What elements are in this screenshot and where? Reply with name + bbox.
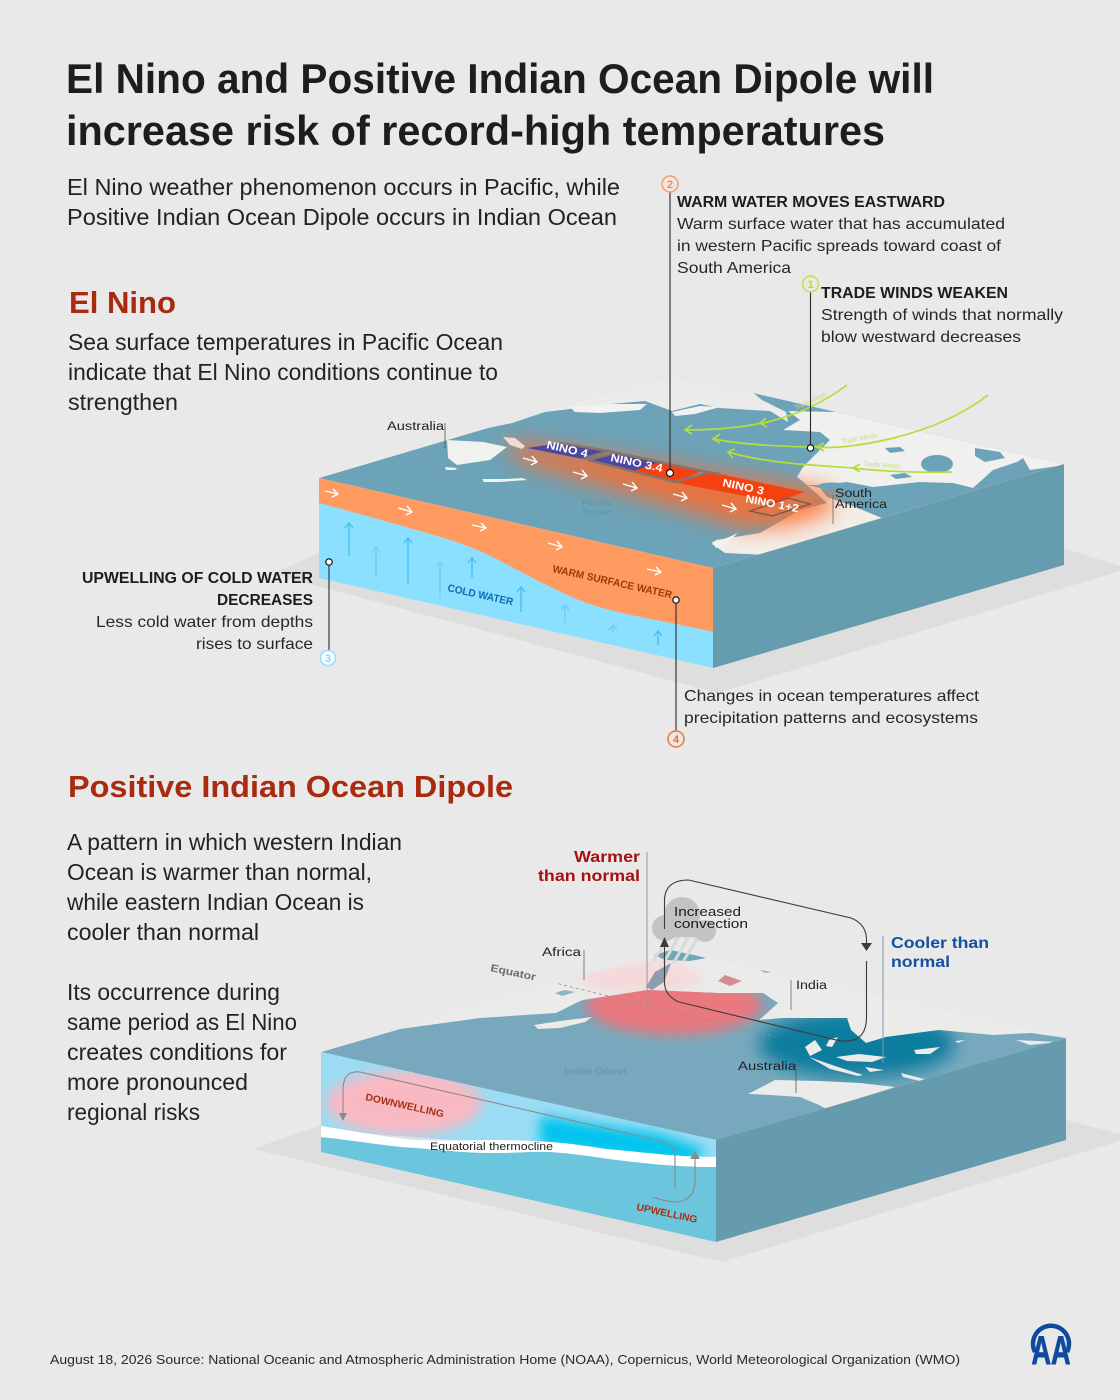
callout: cooler than normal: normal	[891, 954, 950, 971]
text: El Nino description: Sea surface temperatures in Pacific Ocean	[68, 329, 503, 355]
label: downwelling: DOWNWELLING	[364, 1092, 445, 1120]
block right side	[716, 1038, 1066, 1242]
label: India	[791, 980, 828, 1010]
trade wind labels: Trade Winds	[794, 391, 828, 412]
callout: cooler than normal	[883, 935, 989, 1063]
title: increase risk of record-high temperatures	[66, 107, 885, 154]
rain	[654, 935, 705, 962]
convection loop arrows	[664, 880, 866, 1041]
pink haze on land	[578, 962, 702, 994]
label: South America	[833, 488, 888, 524]
text: dipole description: cooler than normal	[67, 919, 259, 945]
text: El Nino description: indicate that El Nino conditions continue to	[68, 359, 498, 385]
text: dipole description: more pronounced	[67, 1069, 248, 1095]
Nino labels: NINO 4	[545, 439, 590, 461]
callout 2: warm water moves eastward: Warm surface water that has accumulated	[677, 216, 1005, 233]
land: Asia	[486, 374, 788, 429]
callout 3: upwelling of cold water decreases	[82, 559, 336, 666]
trade wind labels: Trade Winds	[841, 432, 878, 446]
islands	[805, 1040, 822, 1056]
logo: AA	[1032, 1326, 1070, 1373]
Nino labels: NINO 1+2	[744, 493, 800, 515]
Nino labels: NINO 3.4	[609, 452, 665, 475]
footer source: August 18, 2026 Source: National Oceanic and Atmospheric Administration Home (NOAA), Copernicus, World Meteorological Organization (WMO)	[50, 1352, 960, 1367]
callout 4: ocean temperature effects: Changes in ocean temperatures affect	[684, 688, 980, 705]
label: Pacific Ocean	[582, 499, 613, 517]
text: dipole description	[66, 829, 402, 1125]
callout 3: upwelling of cold water decreases: 3	[325, 653, 331, 665]
callout 4: ocean temperature effects: 4	[673, 734, 680, 746]
label: Australia	[387, 421, 445, 448]
label: Australia: Australia	[738, 1061, 797, 1073]
callout: cooler than normal: Cooler than	[891, 935, 989, 952]
callout 2: warm water moves eastward: WARM WATER MOVES EASTWARD	[677, 194, 945, 211]
label: Africa	[542, 947, 584, 980]
subtitle: El Nino weather phenomenon occurs in Pacific, while	[67, 174, 620, 200]
callout 3: upwelling of cold water decreases: DECREASES	[217, 592, 313, 609]
callout: warmer than normal	[538, 849, 647, 1009]
title	[66, 55, 934, 154]
map surface	[319, 372, 1064, 568]
block right side	[713, 464, 1064, 668]
label: equatorial thermocline: Equatorial thermocline	[430, 1141, 553, 1153]
label: Equator: Equator	[489, 962, 537, 983]
text: El Nino description	[68, 329, 503, 415]
label: increased convection	[674, 904, 748, 931]
block shadow	[253, 1120, 1120, 1262]
block front: upper water	[321, 1052, 716, 1160]
circulation arrows in the water	[343, 1072, 695, 1202]
cool upwelling zone	[540, 1116, 706, 1165]
ocean	[321, 990, 1066, 1140]
callout 1: trade winds weaken: TRADE WINDS WEAKEN	[821, 285, 1008, 302]
text: dipole description: same period as El Nino	[67, 1009, 297, 1035]
title: El Nino and Positive Indian Ocean Dipole will	[66, 55, 934, 102]
cloud	[652, 897, 716, 942]
text: dipole description: creates conditions for	[67, 1039, 287, 1065]
warm water glow	[505, 440, 832, 528]
callout: warmer than normal: than normal	[538, 868, 640, 885]
label: Pacific Ocean: Pacific	[582, 499, 613, 508]
Nino regions	[527, 443, 810, 516]
callout 2: warm water moves eastward	[662, 176, 1005, 476]
callout 4: ocean temperature effects: precipitation patterns and ecosystems	[684, 710, 978, 727]
text: dipole description: Its occurrence during	[67, 979, 280, 1005]
text: dipole description: regional risks	[67, 1099, 200, 1125]
map surface	[321, 948, 1066, 1140]
Hudson water	[921, 455, 953, 473]
callout 2: warm water moves eastward: in western Pacific spreads toward coast of	[677, 238, 1002, 255]
trade wind arrows	[685, 385, 988, 472]
cold water layer	[319, 503, 713, 668]
block shadow	[272, 548, 1120, 693]
land: North America	[783, 411, 1064, 488]
cool ocean zone	[759, 1011, 955, 1077]
label: Australia: Australia	[387, 421, 445, 433]
label: Africa: Africa	[542, 947, 582, 959]
callout 2: warm water moves eastward: South America	[677, 260, 791, 277]
text: dipole description: A pattern in which western Indian	[67, 829, 402, 855]
land: Australia	[447, 440, 507, 465]
callout 4: ocean temperature effects	[668, 597, 980, 747]
label: India: India	[796, 980, 828, 992]
northern water	[654, 950, 706, 961]
label: warm surface water: WARM SURFACE WATER	[551, 563, 673, 601]
Australia	[748, 1080, 895, 1110]
warm ocean zone	[586, 975, 762, 1035]
subtitle: Positive Indian Ocean Dipole occurs in Indian Ocean	[67, 204, 617, 230]
surface arrows	[325, 456, 736, 575]
diagram: El Nino block	[272, 372, 1120, 693]
label: Indian Ocean: Indian Ocean	[564, 1067, 626, 1076]
trade wind labels	[794, 391, 901, 471]
diagram: Indian Ocean Dipole block	[253, 849, 1120, 1262]
label: cold water: COLD WATER	[446, 582, 515, 609]
callout 1: trade winds weaken: blow westward decreases	[821, 329, 1021, 346]
upward cold water arrows	[345, 523, 662, 645]
callout 1: trade winds weaken: Strength of winds that normally	[821, 307, 1063, 324]
warm water layer	[319, 478, 713, 632]
equator	[558, 984, 775, 1038]
thermocline band	[321, 1126, 716, 1167]
land: South America	[712, 485, 882, 555]
text: El Nino description: strengthen	[68, 389, 178, 415]
heading: El Nino: El Nino	[69, 285, 176, 320]
callout: warmer than normal: Warmer	[574, 849, 640, 866]
label: Australia	[738, 1061, 797, 1093]
Nino labels	[545, 439, 800, 515]
label: Pacific Ocean: Ocean	[583, 508, 612, 517]
callout 3: upwelling of cold water decreases: Less cold water from depths	[96, 614, 313, 631]
label: South America: South	[835, 488, 872, 500]
callout 3: upwelling of cold water decreases: UPWELLING OF COLD WATER	[82, 570, 313, 587]
trade wind labels: Trade Winds	[863, 461, 901, 471]
Nino labels: NINO 3	[721, 477, 765, 498]
callout 1: trade winds weaken	[802, 276, 1063, 451]
callout 3: upwelling of cold water decreases: rises to surface	[196, 636, 313, 653]
heading: Positive Indian Ocean Dipole: Positive Indian Ocean Dipole	[68, 769, 513, 804]
text: dipole description: Ocean is warmer than normal,	[67, 859, 372, 885]
text: dipole description: while eastern Indian Ocean is	[66, 889, 364, 915]
warm downwelling zone	[326, 1071, 482, 1135]
callout 2: warm water moves eastward: 2	[667, 179, 673, 191]
label: increased convection: Increased	[674, 904, 741, 919]
label: upwelling: UPWELLING	[635, 1202, 699, 1226]
label: increased convection: convection	[674, 916, 748, 931]
callout 1: trade winds weaken: 1	[807, 279, 814, 291]
subtitle	[67, 174, 620, 230]
Madagascar	[534, 1017, 592, 1029]
label: South America: America	[835, 499, 888, 511]
block front: lower water	[321, 1137, 716, 1242]
logo: AA: AA	[1032, 1329, 1070, 1373]
